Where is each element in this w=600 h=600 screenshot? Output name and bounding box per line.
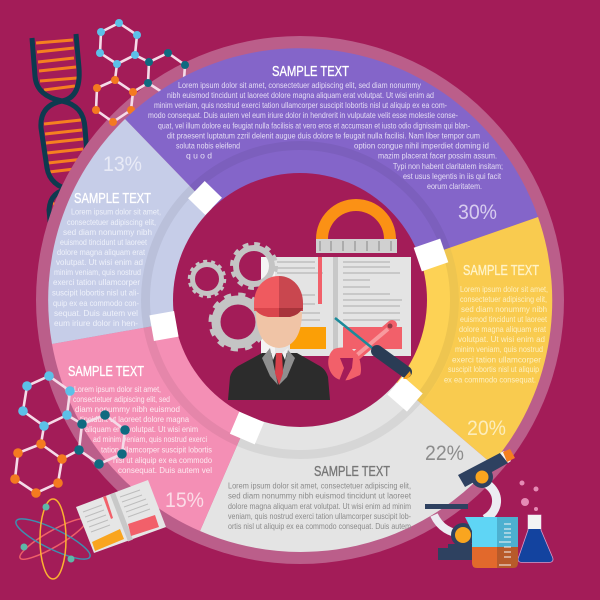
- text block: grey slice: Lorem ipsum dolor sit amet, consectetuer adipiscing elit,: [228, 480, 411, 490]
- percentage: 20%: 20%: [467, 417, 506, 440]
- percentage: 30%: 30%: [458, 201, 497, 224]
- text block: lavender slice: euismod tincidunt ut laoreet: [60, 237, 147, 247]
- slice: pink 15%: [52, 300, 300, 531]
- heading: lavender: SAMPLE TEXT: [74, 191, 151, 207]
- text block: lavender slice: sequat. Duis autem vel: [54, 308, 138, 318]
- text block: pink slice: tation ullamcorper suscipit lobortis: [101, 444, 212, 454]
- percentage: 15%: 15%: [165, 489, 204, 512]
- text block: purple slice: est usus legentis in iis qui facit: [403, 171, 502, 181]
- text block: grey slice: ortis nisl ut aliquip ex ea commodo consequat. Duis autem: [228, 521, 411, 531]
- icon: DNA helix: [32, 34, 88, 252]
- text block: purple slice: mazim placerat facer possim assum.: [378, 150, 497, 160]
- heading: pink: SAMPLE TEXT: [68, 364, 144, 380]
- text block: pink slice: tincidunt ut laoreet dolore magna: [80, 414, 189, 424]
- text block: purple slice: soluta nobis eleifend: [176, 140, 240, 150]
- text block: lavender slice: eum iriure dolor in hen-: [54, 318, 138, 328]
- text block: yellow slice: sed diam nonummy nibh: [461, 304, 547, 314]
- icon: gears: [190, 244, 276, 349]
- text block: lavender slice: [52, 191, 161, 328]
- slice: yellow 20%: [300, 217, 552, 464]
- text block: yellow slice: dolore magna aliquam erat: [459, 324, 547, 334]
- text block: yellow slice: suscipit lobortis nisl ut aliquip: [448, 364, 539, 374]
- text block: pink slice: aliquam erat volutpat. Ut wisi enim: [85, 424, 198, 434]
- icon: beaker: [465, 517, 518, 568]
- text block: pink slice: diam nonummy nibh euismod: [75, 404, 180, 414]
- text block: lavender slice: exerci tation ullamcorper: [53, 277, 140, 287]
- text block: yellow slice: euismod tincidunt ut laoreet: [460, 314, 547, 324]
- text block: purple slice: Lorem ipsum dolor sit amet, consectetuer adipiscing elit, sed diam nonummy: [178, 80, 422, 90]
- text block: lavender slice: quip ex ea commodo con-: [53, 298, 139, 308]
- panel: pie ring slices: [48, 48, 552, 552]
- white slice separators: [149, 181, 448, 444]
- icon: upper molecule: [92, 19, 189, 126]
- icon: wrench: [328, 324, 392, 381]
- text block: lavender slice: dolore magna aliquam erat: [57, 247, 146, 257]
- text block: yellow slice: minim veniam, quis nostrud: [455, 344, 543, 354]
- text block: purple slice: quat, vel illum dolore eu feugiat nulla facilisis at vero eros et accumsan et iusto odio dignissim qui blan-: [158, 120, 470, 130]
- text block: grey slice: veniam, quis nostrud exerci tation ullamcorper suscipit lob-: [228, 511, 411, 521]
- heading: grey: SAMPLE TEXT: [314, 464, 390, 480]
- text block: yellow slice: Lorem ipsum dolor sit amet,: [460, 284, 548, 294]
- text block: lavender slice: suscipit lobortis nisl ut ali-: [52, 287, 139, 297]
- text block: purple slice: q u o d: [186, 150, 212, 160]
- percentage: 22%: 22%: [425, 442, 464, 465]
- text block: lavender slice: consectetuer adipiscing elit,: [67, 217, 156, 227]
- text block: purple slice: modo consequat. Duis autem vel eum iriure dolor in hendrerit in vulputate velit esse molestie conse-: [148, 110, 458, 120]
- text block: purple slice: [148, 64, 503, 191]
- text block: lavender slice: volutpat. Ut wisi enim ad: [56, 257, 143, 267]
- text block: pink slice: consequat. Duis autem vel: [118, 465, 212, 475]
- icon: screwdriver: [335, 318, 411, 379]
- text block: grey slice: [228, 464, 412, 531]
- text block: lavender slice: minim veniam, quis nostrud: [54, 267, 141, 277]
- text block: pink slice: Lorem ipsum dolor sit amet,: [74, 384, 161, 394]
- slice: grey 22%: [200, 300, 492, 552]
- text block: pink slice: nisl ut aliquip ex ea commodo: [113, 455, 212, 465]
- text block: purple slice: Typi non habent claritatem insitam;: [393, 161, 503, 171]
- text block: purple slice: eorum claritatem.: [427, 181, 482, 191]
- icon: chemistry flask: [518, 480, 553, 562]
- heading: yellow: SAMPLE TEXT: [463, 263, 539, 279]
- text block: pink slice: ad minim veniam, quis nostrud exerci: [93, 434, 207, 444]
- text block: yellow slice: exerci tation ullamcorper: [452, 354, 541, 364]
- icon: microscope: [425, 449, 515, 560]
- text block: grey slice: dolore magna aliquam erat volutpat. Ut wisi enim ad minim: [228, 501, 411, 511]
- heading: purple: SAMPLE TEXT: [272, 64, 349, 80]
- text block: lavender slice: Lorem ipsum dolor sit amet,: [71, 206, 161, 216]
- icon: lower molecule: [10, 371, 130, 498]
- text block: grey slice: sed diam nonummy nibh euismod tincidunt ut laoreet: [228, 490, 412, 500]
- icon: atom: [12, 499, 94, 579]
- percentage: 13%: 13%: [103, 153, 142, 176]
- text block: yellow slice: [444, 263, 548, 384]
- illustration: book in centre: [261, 257, 411, 356]
- text block: pink slice: consectetuer adipiscing elit, sed: [73, 394, 170, 404]
- text block: lavender slice: sed diam nonummy nibh: [63, 227, 152, 237]
- outer ring: [36, 36, 564, 564]
- text block: purple slice: nibh euismod tincidunt ut laoreet dolore magna aliquam erat volutpat. Ut wisi enim ad: [167, 90, 434, 100]
- centre hole: [173, 173, 427, 427]
- text block: purple slice: option congue nihil imperdiet doming id: [354, 140, 489, 150]
- icon: protractor: [316, 199, 397, 253]
- text block: yellow slice: volutpat. Ut wisi enim ad: [458, 334, 545, 344]
- text block: yellow slice: consectetuer adipiscing elit,: [460, 294, 547, 304]
- slice: purple 30%: [125, 48, 538, 300]
- text block: purple slice: minim veniam, quis nostrud exerci tation ullamcorper suscipit lobortis nisl ut aliquip ex ea com-: [154, 100, 447, 110]
- illustration: engineer: [228, 276, 330, 400]
- text block: yellow slice: ex ea commodo consequat.: [444, 374, 536, 384]
- text block: purple slice: dit praesent luptatum zzril delenit augue duis dolore te feugait nulla facilisi. Nam liber tempor cum: [167, 130, 480, 140]
- slice: lavender 13%: [48, 119, 300, 344]
- text block: pink slice: [68, 364, 212, 475]
- icon: open book lower left: [76, 480, 166, 553]
